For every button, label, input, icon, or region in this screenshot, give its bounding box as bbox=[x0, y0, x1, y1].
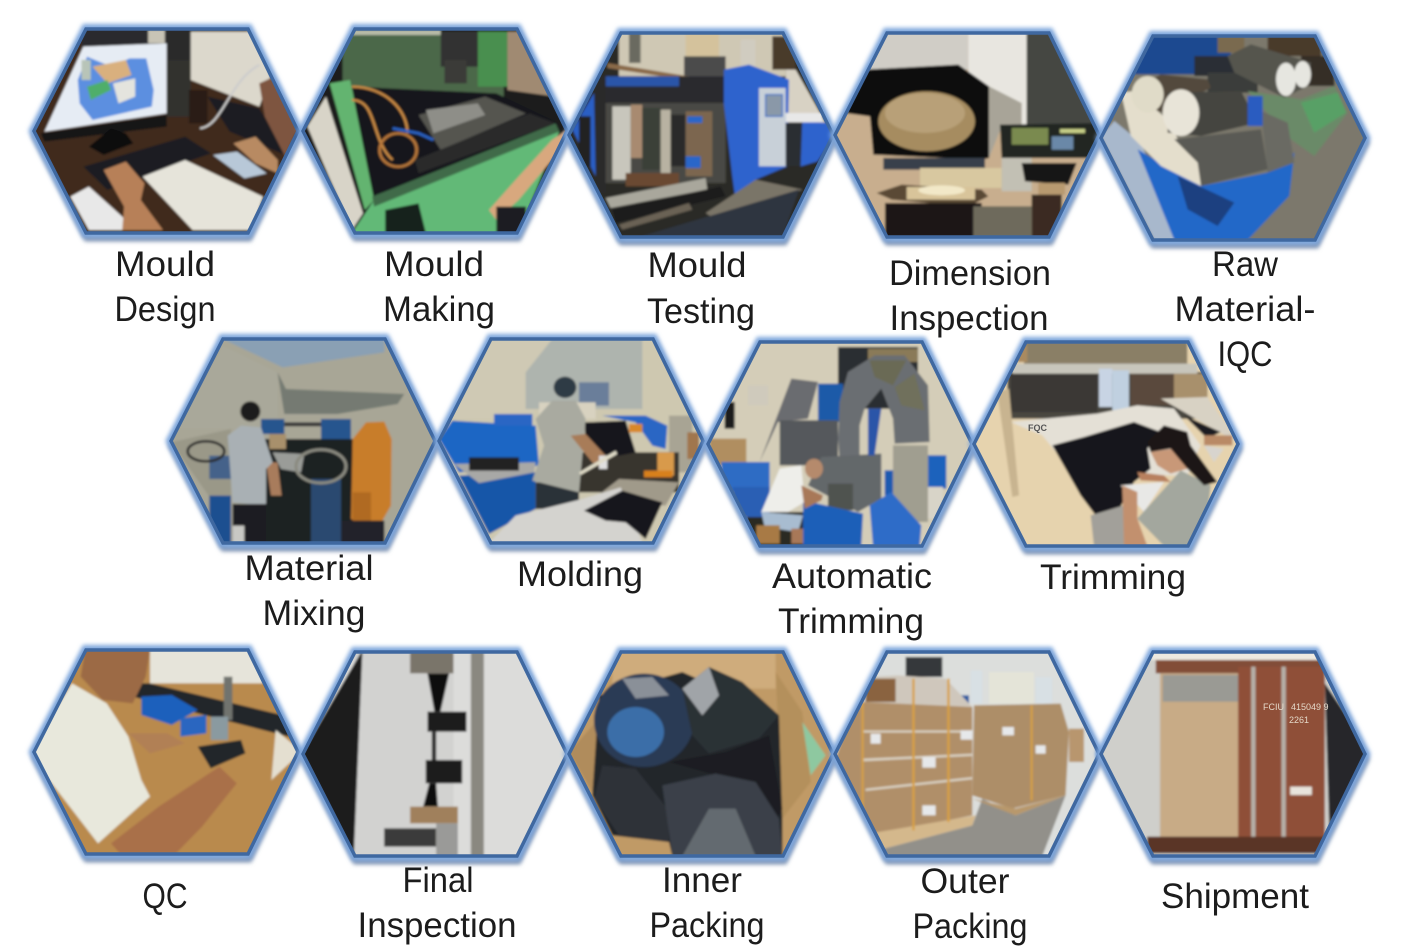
label: Mould Design: Design bbox=[114, 290, 216, 329]
label: Automatic Trimming bbox=[772, 557, 932, 641]
label: Dimension Inspection: Inspection bbox=[890, 299, 1048, 338]
step: Raw Material IQC bbox=[1101, 36, 1366, 374]
hexagon photo: optical profile projector bbox=[835, 33, 1100, 242]
label: Raw Material-IQC: Material- bbox=[1174, 290, 1316, 329]
step: Final Inspection bbox=[297, 650, 575, 945]
label: Dimension Inspection bbox=[889, 254, 1051, 338]
label: Outer Packing: Outer bbox=[920, 862, 1010, 901]
step: Shipment bbox=[1086, 650, 1373, 916]
label: QC: QC bbox=[142, 877, 188, 916]
hexagon photo: worker trimming black rubber parts bbox=[974, 342, 1239, 551]
container markings: FCIU bbox=[1263, 702, 1284, 712]
container markings: 415049 9 bbox=[1291, 702, 1329, 712]
label: Mould Design bbox=[114, 245, 216, 329]
hexagon photo: worker beside automatic trimming machine bbox=[708, 342, 973, 551]
hexagon photo: inspector using durometer on a table bbox=[29, 647, 306, 860]
label: Inner Packing: Packing bbox=[650, 906, 764, 945]
label: Mould Design: Mould bbox=[115, 245, 215, 284]
label: Mould Making: Mould bbox=[384, 245, 484, 284]
step: Mould Testing bbox=[569, 33, 834, 331]
step: Molding bbox=[439, 339, 704, 594]
label: Raw Material-IQC: Raw bbox=[1212, 245, 1279, 284]
label: Inner Packing: Inner bbox=[662, 861, 742, 900]
label: Material Mixing: Mixing bbox=[262, 594, 366, 633]
step: Material Mixing bbox=[171, 339, 436, 633]
label: Mould Testing bbox=[647, 246, 755, 331]
label: Raw Material-IQC bbox=[1174, 245, 1316, 374]
label: Dimension Inspection: Dimension bbox=[889, 254, 1051, 293]
label: Final Inspection bbox=[358, 861, 516, 945]
label: Shipment: Shipment bbox=[1161, 877, 1309, 916]
label: Final Inspection: Inspection bbox=[358, 906, 516, 945]
hexagon photo: tensile testing machine bbox=[297, 650, 575, 861]
hexagon photo: loaded shipping container with cargo net bbox=[1086, 650, 1373, 861]
hexagon photo: rubber rolls wrapped on a pallet bbox=[1101, 36, 1366, 245]
step: Dimension Inspection bbox=[835, 33, 1100, 338]
label: Trimming: Trimming bbox=[1040, 558, 1186, 597]
label: Inner Packing bbox=[650, 861, 764, 945]
label: Outer Packing bbox=[912, 862, 1028, 946]
hexagon photo: designer at CAD workstation bbox=[30, 27, 311, 238]
hexagon photo: blue injection testing machine bbox=[569, 33, 834, 242]
label: Material Mixing: Material bbox=[244, 549, 374, 588]
hexagon photo: CNC machine cutting a mould bbox=[300, 27, 574, 238]
label: Final Inspection: Final bbox=[402, 861, 474, 900]
step: QC bbox=[29, 647, 306, 916]
hexagon photo: carton with bagged black rubber parts bbox=[569, 652, 834, 861]
label: Outer Packing: Packing bbox=[912, 907, 1028, 946]
label: Mould Testing: Testing bbox=[647, 292, 755, 331]
step: Automatic Trimming bbox=[708, 342, 973, 641]
hexagon photo: palletised cartons in warehouse bbox=[832, 652, 1100, 861]
label: Mould Making bbox=[383, 245, 495, 329]
label: Automatic Trimming: Automatic bbox=[772, 557, 932, 596]
step: Mould Design bbox=[30, 27, 311, 329]
container markings bbox=[1263, 702, 1329, 725]
hexagon photo: worker at rubber mixing mill bbox=[171, 339, 436, 548]
label: Mould Making: Making bbox=[383, 290, 495, 329]
label: Raw Material-IQC: IQC bbox=[1218, 335, 1272, 374]
step: Trimming bbox=[974, 342, 1239, 597]
step: Outer Packing bbox=[832, 652, 1100, 946]
hexagon photo: worker at molding press bbox=[439, 339, 704, 548]
step: Inner Packing bbox=[569, 652, 834, 945]
FQC marking on the bin: FQC bbox=[1028, 423, 1047, 433]
step: Mould Making bbox=[300, 27, 574, 329]
label: Molding: Molding bbox=[517, 555, 643, 594]
label: Material Mixing bbox=[244, 549, 374, 633]
label: Mould Testing: Mould bbox=[648, 246, 746, 285]
container markings: 2261 bbox=[1289, 715, 1309, 725]
label: Automatic Trimming: Trimming bbox=[778, 602, 924, 641]
